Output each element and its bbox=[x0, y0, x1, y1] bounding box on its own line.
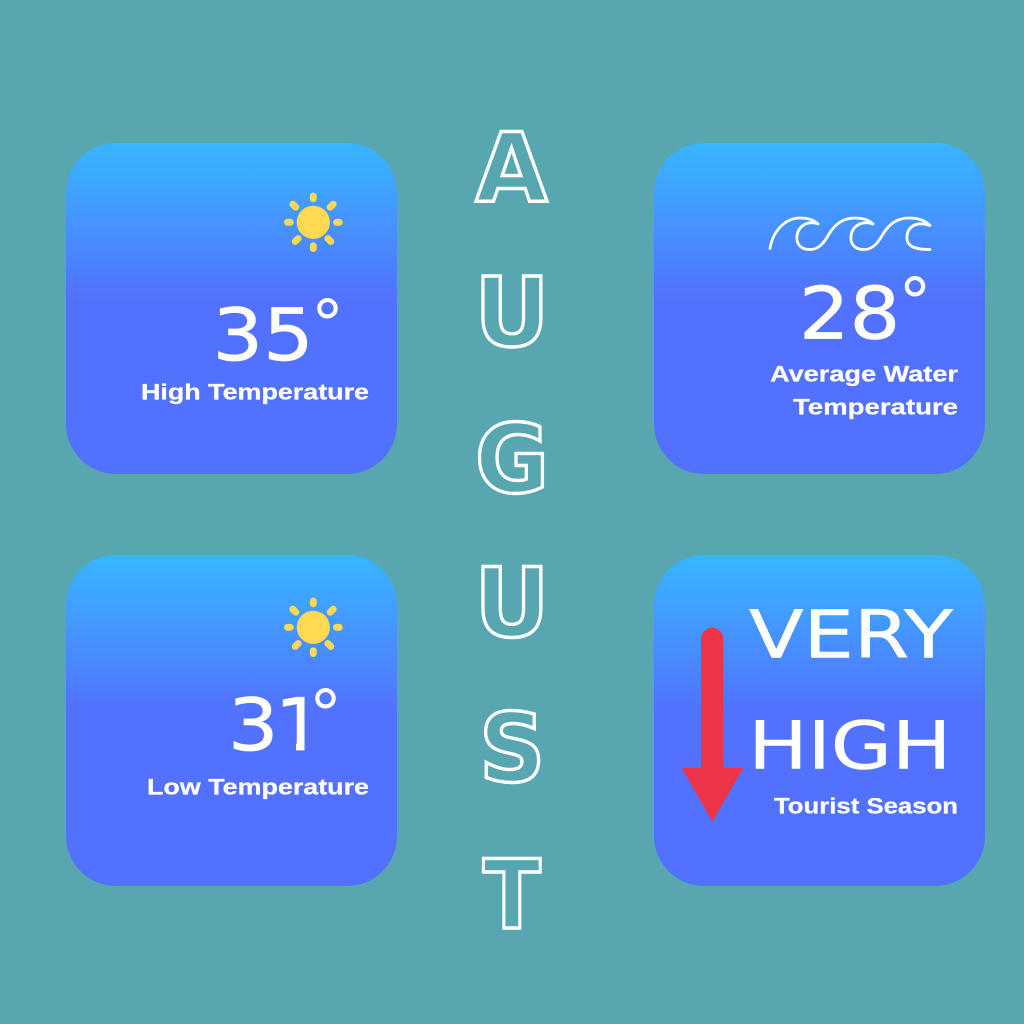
label: high temperature: High Temperature bbox=[141, 380, 369, 404]
icon: sun bbox=[288, 196, 339, 249]
panel: tourist season bbox=[654, 555, 985, 886]
title: August vertical outlined letters: G bbox=[475, 404, 549, 515]
card background bbox=[654, 143, 985, 474]
value: 35 degrees: 35 bbox=[212, 294, 314, 377]
title: August vertical outlined letters: S bbox=[479, 694, 545, 804]
card background bbox=[66, 143, 397, 474]
label: average water temperature: Average Water bbox=[770, 362, 958, 386]
label: average water temperature bbox=[770, 362, 958, 420]
card background bbox=[654, 555, 985, 886]
value: 31 degrees bbox=[234, 688, 336, 752]
label: low temperature: Low Temperature bbox=[147, 774, 369, 800]
panel: low temperature bbox=[66, 555, 397, 886]
value: 31 degrees: 1 bbox=[274, 684, 325, 767]
icon: waves bbox=[770, 218, 930, 250]
panel: average water temperature bbox=[654, 143, 985, 474]
value: 28 degrees: ° bbox=[898, 264, 932, 341]
title: August vertical outlined letters: U bbox=[474, 549, 549, 659]
value: 31 degrees: ° bbox=[309, 676, 342, 753]
value: high: HIGH bbox=[748, 709, 951, 785]
value: 28 degrees bbox=[799, 264, 932, 356]
arrow: down bbox=[682, 628, 743, 822]
panel: high temperature bbox=[66, 143, 397, 474]
title: August vertical outlined letters: A bbox=[476, 114, 548, 224]
title: August vertical outlined letters: U bbox=[474, 258, 549, 369]
title: August vertical outlined letters bbox=[474, 114, 549, 951]
value: 35 degrees: ° bbox=[311, 286, 344, 363]
value: 31 degrees: 3 bbox=[228, 684, 279, 767]
icon: sun bbox=[288, 601, 339, 654]
title: August vertical outlined letters: T bbox=[483, 841, 541, 951]
label: average water temperature: Temperature bbox=[793, 394, 958, 420]
value: 28 degrees: 28 bbox=[799, 272, 900, 356]
label: tourist season: Tourist Season bbox=[774, 794, 958, 818]
value: very: VERY bbox=[749, 597, 953, 674]
card background bbox=[66, 555, 397, 886]
